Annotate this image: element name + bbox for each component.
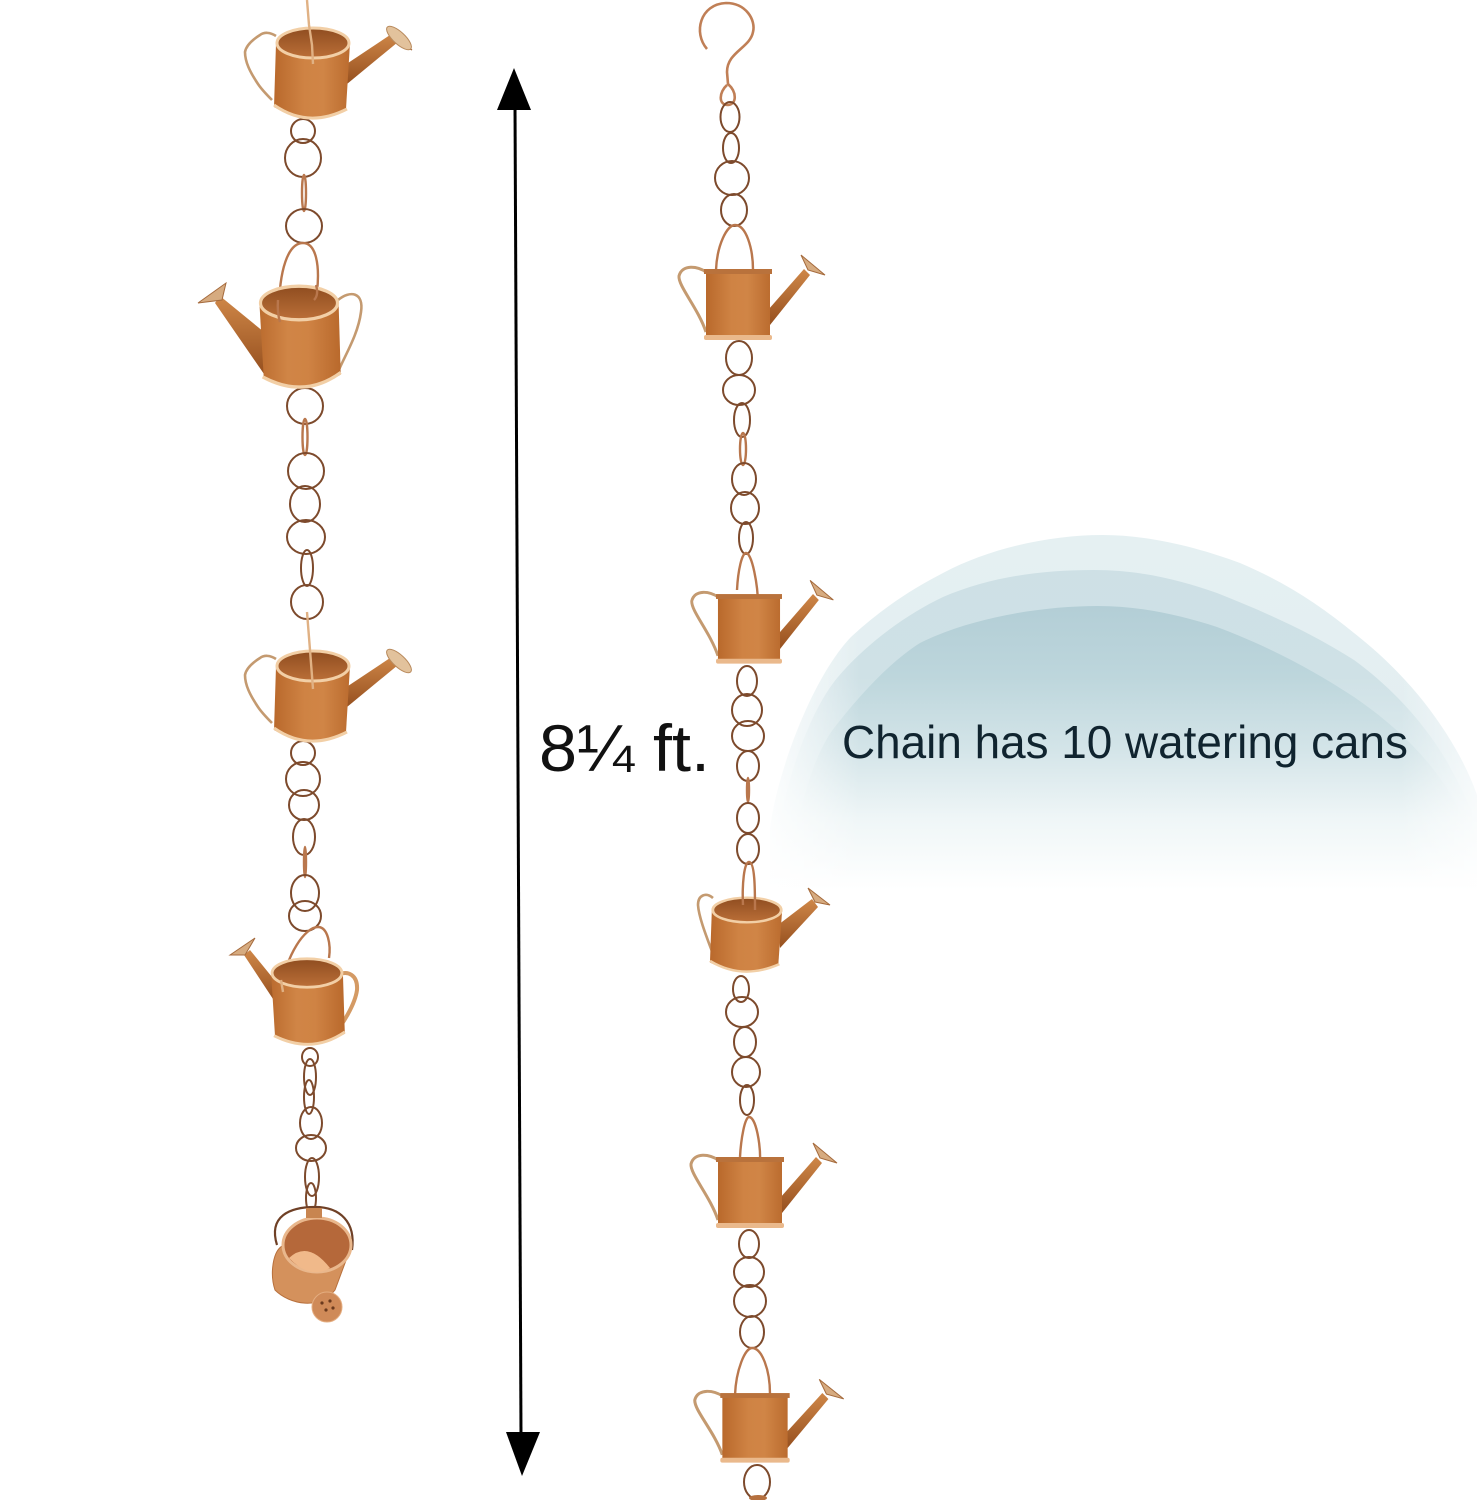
right rain chain (679, 3, 844, 1500)
watering can 5 seen from above (272, 1207, 353, 1322)
left chain links (279, 119, 326, 1213)
watering can 10 (695, 1379, 844, 1463)
watering can 4 (230, 927, 357, 1044)
watering can 7 (692, 580, 833, 664)
left rain chain (198, 0, 415, 1322)
right chain links (715, 102, 770, 1500)
hook (700, 3, 754, 105)
watering can 2 (198, 283, 361, 387)
watering can 3 (245, 612, 415, 741)
watering can 1 (245, 0, 415, 118)
height label: 8¼ ft. (539, 711, 710, 785)
watering can 9 (691, 1143, 837, 1228)
watering can 6 (679, 255, 825, 340)
watering can 8 (698, 862, 830, 972)
decorative water dome panel (765, 535, 1477, 905)
height arrow (497, 68, 540, 1476)
callout text: chain has 10 watering cans: Chain has 10 watering cans (842, 716, 1408, 768)
